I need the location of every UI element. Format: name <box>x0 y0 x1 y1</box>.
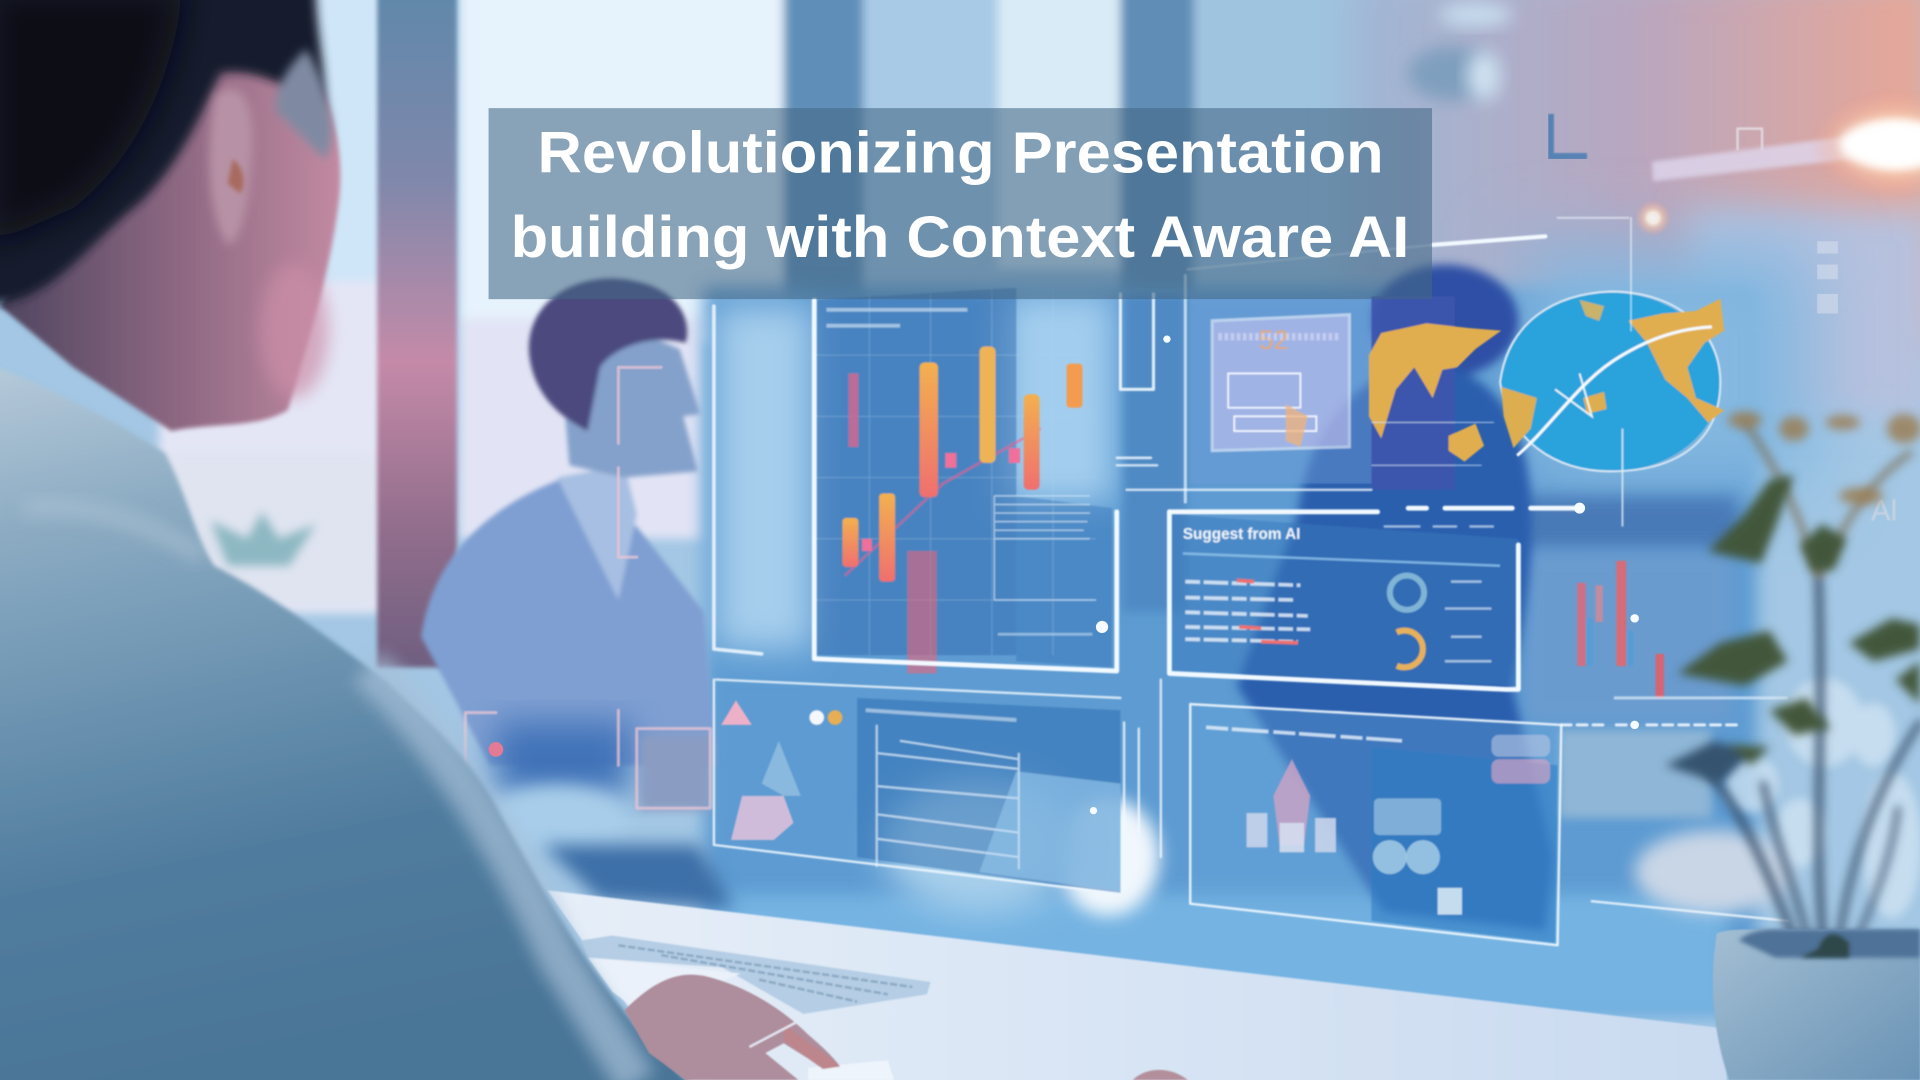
plant and pot <box>1665 411 1920 1080</box>
bottom right diagram panel <box>1190 704 1561 945</box>
foreground person <box>0 0 698 1080</box>
desk <box>547 890 1727 1080</box>
title: Revolutionizing Presentation <box>538 121 1384 186</box>
right side faint labels: Al <box>1871 494 1897 527</box>
hand on mouse <box>624 975 894 1080</box>
second hand at edge <box>1133 1070 1188 1080</box>
AI suggestion panel: Suggest from AI <box>1183 526 1300 543</box>
candlestick chart panel <box>814 284 1112 673</box>
title: building with Context Aware AI <box>511 205 1409 270</box>
AI suggestion panel <box>1169 514 1518 686</box>
world map panel: 52 <box>1258 325 1288 355</box>
right side faint labels <box>1817 241 1897 527</box>
title <box>511 121 1409 270</box>
title banner <box>489 108 1432 299</box>
interface dots <box>489 336 1639 814</box>
glowing interface outlines <box>465 129 1788 945</box>
blurred colleague in background <box>421 279 735 909</box>
corner L mark <box>1550 114 1587 157</box>
lens flare <box>1635 89 1920 236</box>
holographic screen backdrop <box>704 245 1812 1016</box>
bottom left analytics panel <box>721 698 1120 894</box>
keyboard <box>582 936 931 1014</box>
second colleague silhouette <box>1237 264 1553 931</box>
right mini bars <box>1577 561 1788 698</box>
world map panel <box>1190 291 1724 527</box>
